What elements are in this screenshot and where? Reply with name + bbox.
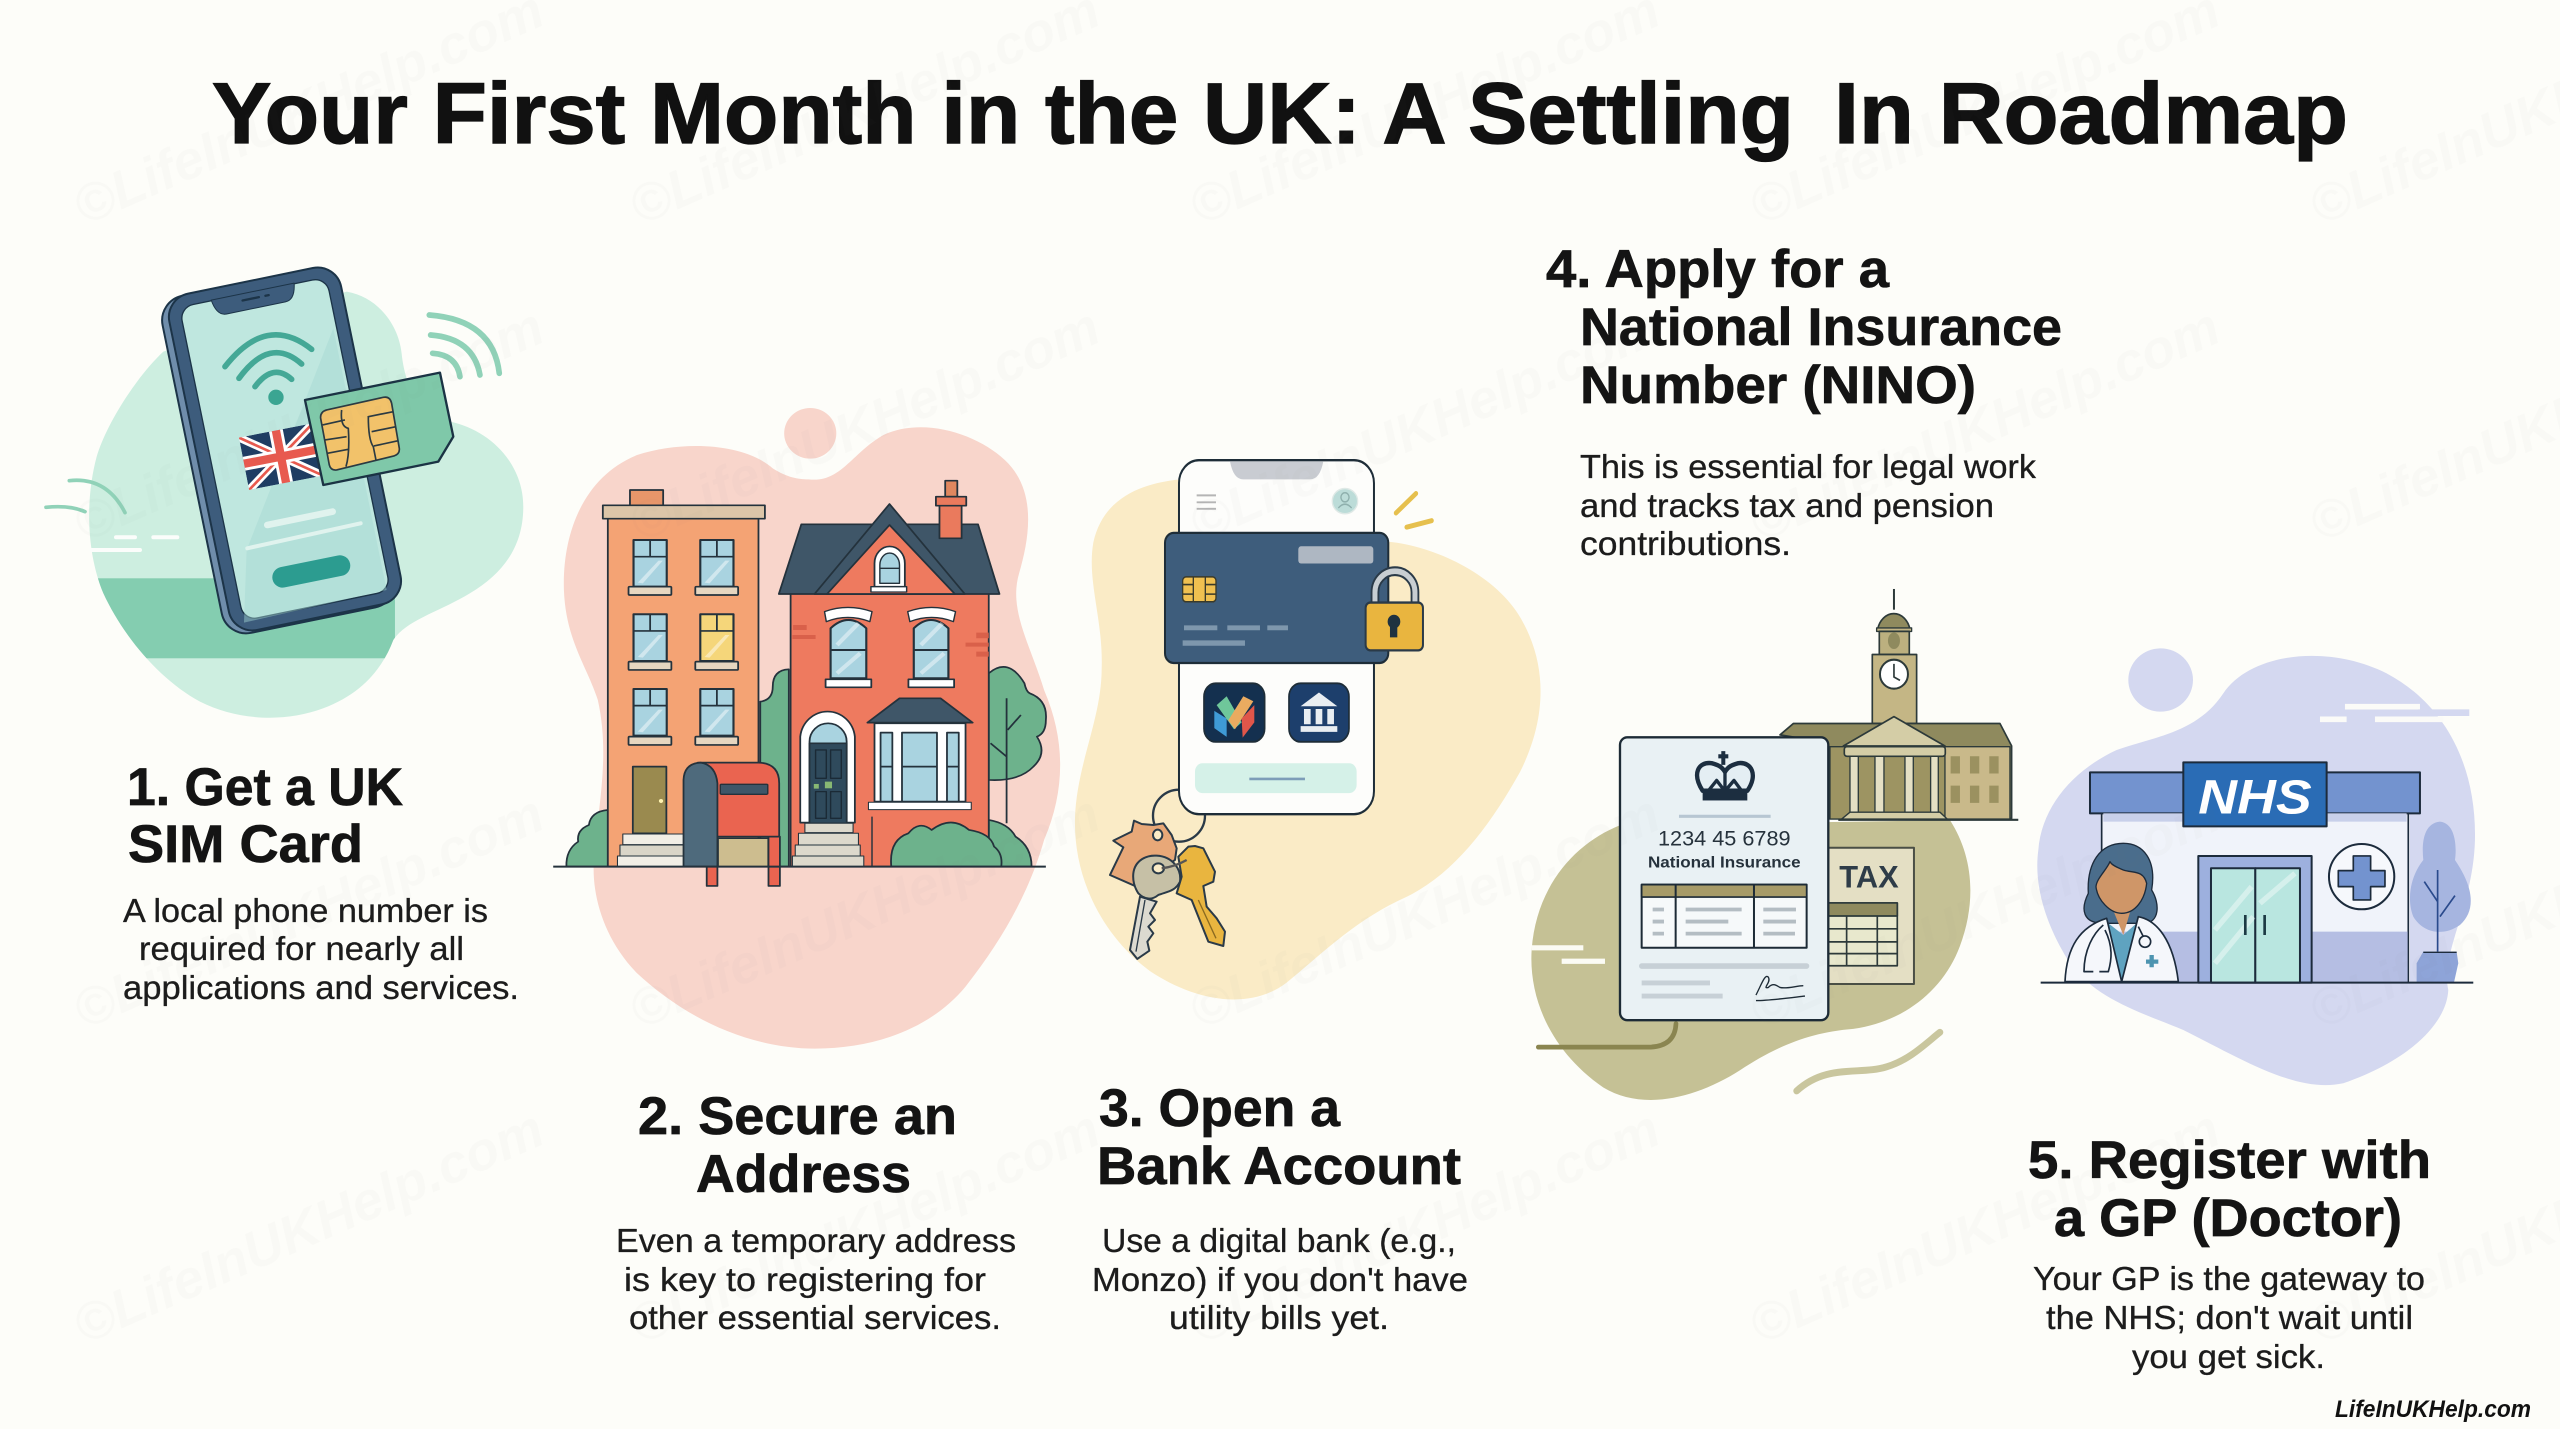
illustration: houses and post box xyxy=(553,408,1060,1049)
illustration: NI document, tax form and town hall: 1234 45 6789 xyxy=(1658,827,1791,850)
heading: 3. Open a xyxy=(1099,1079,1341,1138)
heading xyxy=(638,1087,957,1204)
panel: step 2 address xyxy=(553,408,1060,1336)
watermark pattern: ©LifeInUKHelp.com xyxy=(65,1098,552,1356)
title: Your First Month in the UK: A Settling xyxy=(212,66,1794,162)
watermark pattern: ©LifeInUKHelp.com xyxy=(1741,1098,2228,1356)
heading: SIM Card xyxy=(128,815,363,874)
icon: doctor xyxy=(2065,843,2178,982)
heading: National Insurance xyxy=(1580,298,2062,357)
description xyxy=(2033,1260,2425,1375)
panel: step 1 SIM card xyxy=(46,263,523,1006)
panel: step 5 GP registration xyxy=(2028,648,2475,1375)
heading: 5. Register with xyxy=(2028,1131,2431,1190)
description xyxy=(123,892,519,1006)
description: This is essential for legal work xyxy=(1580,448,2037,485)
watermark pattern: ©LifeInUKHelp.com xyxy=(65,296,552,554)
watermark pattern: ©LifeInUKHelp.com xyxy=(1741,783,2228,1041)
description xyxy=(1580,448,2037,562)
heading xyxy=(1097,1079,1461,1196)
watermark pattern: ©LifeInUKHelp.com xyxy=(1181,296,1668,554)
description: other essential services. xyxy=(629,1299,1001,1336)
heading: 2. Secure an xyxy=(638,1087,957,1146)
description: Use a digital bank (e.g., xyxy=(1102,1222,1456,1259)
description: A local phone number is xyxy=(123,892,488,929)
icon: key ring xyxy=(1153,790,1205,842)
watermark pattern: ©LifeInUKHelp.com xyxy=(621,1098,1108,1356)
description xyxy=(1092,1222,1468,1336)
illustration: NI document, tax form and town hall: TAX xyxy=(1839,859,1899,895)
heading: a GP (Doctor) xyxy=(2054,1189,2402,1248)
footer credit: LifeInUKHelp.com xyxy=(2335,1396,2531,1423)
heading xyxy=(2028,1131,2431,1248)
illustration: NI document, tax form and town hall: National Insurance xyxy=(1648,854,1801,871)
description: the NHS; don't wait until xyxy=(2046,1299,2413,1336)
watermark pattern: ©LifeInUKHelp.com xyxy=(1181,783,1668,1041)
watermark pattern: ©LifeInUKHelp.com xyxy=(1741,296,2228,554)
panel: step 4 National Insurance number xyxy=(1531,240,2062,1100)
icon: house keys xyxy=(1110,821,1225,959)
panel: step 3 bank account xyxy=(1075,460,1541,1336)
watermark pattern: ©LifeInUKHelp.com xyxy=(621,296,1108,554)
description: applications and services. xyxy=(123,969,519,1006)
heading: Number (NINO) xyxy=(1580,356,1976,415)
description: and tracks tax and pension xyxy=(1580,487,1994,524)
heading xyxy=(127,758,403,874)
illustration: NHS clinic and doctor: NHS xyxy=(2198,770,2312,824)
description: you get sick. xyxy=(2132,1338,2325,1375)
description: contributions. xyxy=(1580,525,1791,562)
illustration: NHS clinic and doctor xyxy=(2037,648,2475,1085)
watermark pattern: ©LifeInUKHelp.com xyxy=(621,783,1108,1041)
description: utility bills yet. xyxy=(1169,1299,1389,1336)
heading: Bank Account xyxy=(1097,1137,1461,1196)
heading: 4. Apply for a xyxy=(1546,240,1890,299)
heading xyxy=(1546,240,2062,415)
illustration: banking app, card and lock xyxy=(1075,479,1541,999)
watermark pattern: ©LifeInUKHelp.com xyxy=(65,783,552,1041)
illustration: phone with SIM card xyxy=(46,263,523,718)
description: Your GP is the gateway to xyxy=(2033,1260,2425,1297)
description xyxy=(616,1222,1016,1336)
title: In Roadmap xyxy=(1834,66,2348,162)
heading: 1. Get a UK xyxy=(127,758,403,817)
description: required for nearly all xyxy=(139,930,464,967)
description: Monzo) if you don't have xyxy=(1092,1261,1468,1298)
watermark pattern: ©LifeInUKHelp.com xyxy=(1181,1098,1668,1356)
illustration: NI document, tax form and town hall xyxy=(1531,589,2018,1100)
heading: Address xyxy=(696,1145,911,1204)
description: is key to registering for xyxy=(624,1261,986,1298)
banking app screen xyxy=(1165,460,1423,814)
description: Even a temporary address xyxy=(616,1222,1016,1259)
